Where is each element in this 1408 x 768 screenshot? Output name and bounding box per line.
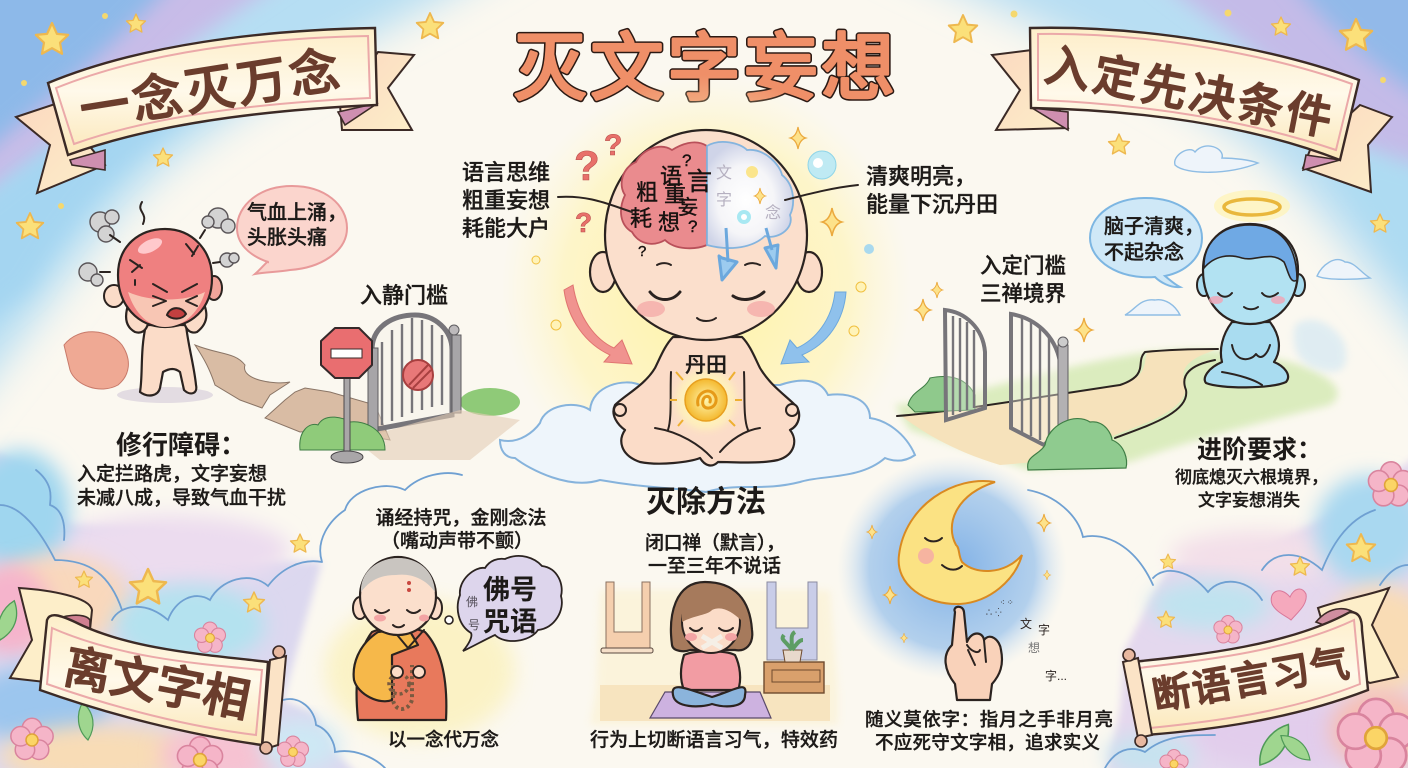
room illustration — [590, 582, 838, 725]
centre glow — [501, 75, 911, 505]
bubble text: 佛号 — [483, 575, 537, 605]
brain words: 言 — [687, 168, 712, 196]
steam puffs — [79, 208, 239, 286]
girl — [671, 582, 752, 706]
thought bubble — [445, 556, 562, 651]
head — [118, 229, 212, 327]
text: left brain labels: 耗能大户 — [462, 216, 550, 241]
head — [605, 130, 807, 340]
brain words: ? — [682, 151, 691, 170]
brain cloud — [707, 142, 793, 248]
text: 进阶要求: 进阶要求： — [1197, 436, 1322, 464]
banner text: 入定先决条件 — [1041, 38, 1339, 146]
text: 闭口禅: 闭口禅（默言）， — [645, 532, 785, 554]
gate closed — [368, 315, 520, 438]
bush: front — [1028, 419, 1127, 470]
banner: 一念灭万念 — [16, 28, 414, 193]
text body: 文字妄想消失 — [1198, 490, 1300, 510]
tan ground at gate and bush — [300, 410, 520, 460]
speech bubble: 脑子清爽 — [1090, 198, 1204, 287]
small clouds — [1125, 146, 1370, 315]
text: left brain labels: 粗重妄想 — [462, 188, 550, 213]
speech bubble: 气血上涌 — [237, 186, 347, 274]
brain down arrows — [719, 228, 778, 280]
bubble text — [1104, 215, 1204, 264]
figure: blue meditating child — [1197, 190, 1346, 387]
text: 诵经持咒: 诵经持咒，金刚念法 — [375, 506, 547, 529]
text body: 未减八成，导致气血干扰 — [77, 487, 286, 509]
text: left brain labels: 语言思维 — [462, 160, 550, 185]
arms — [126, 295, 206, 333]
figure: central meditating child — [590, 130, 822, 465]
cracked path — [195, 345, 390, 440]
floating letters — [985, 598, 1067, 683]
brain words: 语 — [660, 164, 682, 189]
banner: 离文字相 — [10, 588, 286, 754]
brain red — [621, 142, 707, 248]
floating letters: 文 — [1020, 616, 1032, 631]
sparkles around head — [532, 127, 874, 336]
text: 修行障碍 — [77, 430, 286, 509]
floating letters: ∴ ⁛ — [985, 608, 1002, 617]
head — [1197, 274, 1211, 296]
text body: 彻底熄灭六根境界， — [1175, 468, 1328, 487]
figure: angry red-headed child — [64, 202, 239, 403]
floating letters: 想 — [1028, 640, 1040, 655]
brain faint glyphs — [716, 164, 781, 222]
floating letters: 字... — [1045, 668, 1067, 683]
brain faint glyphs: 念 — [765, 203, 781, 222]
banner text: 断语言习气 — [1149, 642, 1354, 719]
bush: behind left gate — [908, 377, 975, 412]
title: 灭文字妄想 — [514, 28, 898, 109]
text: 诵经持咒: （嘴动声带不颤） — [381, 530, 533, 552]
banner text: 离文字相 — [60, 640, 254, 727]
background: top-left sky corner — [0, 0, 540, 440]
body — [1205, 322, 1288, 387]
bubble text: 头胀头痛 — [247, 226, 327, 249]
figure: monk — [325, 557, 515, 740]
title: 灭文字妄想 — [514, 28, 898, 109]
callout line right — [785, 185, 858, 200]
brain words: 妄 — [678, 196, 698, 219]
table and plant — [764, 632, 824, 693]
bubble text — [247, 201, 347, 249]
brain words — [630, 151, 712, 260]
brain faint glyphs: 文 — [716, 164, 732, 182]
text body — [77, 463, 286, 509]
arrow: blue to dantian — [781, 292, 846, 364]
banner text: 一念灭万念 — [76, 42, 346, 138]
small bubble text: 佛 — [466, 595, 478, 609]
brain faint glyphs: 字 — [716, 191, 732, 209]
label: 入定门槛 三禅境界 — [980, 254, 1066, 306]
text: right brain labels: 清爽明亮， — [866, 164, 976, 189]
dantian spiral — [670, 370, 742, 430]
arrow: red to dantian — [564, 285, 632, 364]
bubble text: 咒语 — [483, 607, 537, 637]
brain words: 重 — [664, 182, 686, 207]
question marks: ? — [575, 207, 592, 238]
text: 随义莫依字 — [865, 709, 1113, 753]
text: 随义莫依字: 不应死守文字相，追求实义 — [875, 732, 1100, 753]
text: 进阶要求 — [1175, 436, 1328, 510]
text: 闭口禅 — [645, 532, 785, 577]
gate open left — [945, 310, 985, 420]
background: bottom-left pastel clouds — [0, 440, 462, 768]
body — [613, 337, 799, 465]
question marks: ? — [604, 129, 622, 162]
banner: 入定先决条件 — [992, 28, 1392, 192]
callout line left — [558, 197, 632, 212]
text: right brain labels: 能量下沉丹田 — [866, 192, 998, 217]
small bubble text: 号 — [468, 618, 480, 632]
bubble text: 气血上涌， — [247, 201, 347, 224]
question marks — [574, 129, 622, 238]
robe — [357, 627, 446, 720]
label: 丹田: 丹田 — [685, 354, 727, 377]
mat — [650, 692, 771, 718]
brain words: 耗 — [630, 206, 652, 231]
halo — [1224, 199, 1280, 215]
text: 灭除方法: 灭除方法 — [646, 486, 766, 519]
background: top-right sky corner — [860, 0, 1408, 400]
text: 诵经持咒 — [375, 506, 547, 552]
gate open right — [1011, 314, 1068, 445]
brain words: ? — [638, 243, 646, 260]
text: 以一念代万念: 以一念代万念 — [388, 729, 499, 750]
moon illustration — [837, 456, 1067, 680]
floating letters: 字 — [1038, 622, 1050, 637]
stop sign — [321, 328, 372, 463]
text body — [1175, 468, 1328, 510]
head — [353, 597, 367, 619]
red bush — [64, 332, 128, 389]
centre cloud — [500, 381, 915, 492]
label: 入定门槛 三禅境界: 三禅境界 — [980, 282, 1066, 306]
text: 随义莫依字: 随义莫依字：指月之手非月亮 — [865, 709, 1113, 730]
bubble text: 脑子清爽， — [1104, 215, 1204, 238]
sparkles around gate — [915, 282, 1092, 342]
text: left brain labels — [462, 160, 550, 241]
body — [140, 325, 196, 395]
crescent moon — [899, 481, 1022, 604]
brain words: ? — [688, 217, 697, 236]
bubble text — [483, 575, 537, 637]
brain words: 粗 — [636, 180, 658, 205]
banner: 断语言习气 — [1123, 588, 1398, 747]
text: 闭口禅: 一至三年不说话 — [648, 555, 781, 577]
background: bottom-right pastel clouds — [1028, 440, 1408, 768]
floating letters: ⁖ ⁘ — [1000, 598, 1014, 607]
bubble text: 不起杂念 — [1104, 240, 1184, 264]
pointing hand — [946, 607, 1002, 700]
text: 行为上切断语言习气: 行为上切断语言习气，特效药 — [590, 729, 838, 751]
face — [657, 263, 760, 265]
text body: 入定拦路虎，文字妄想 — [77, 463, 267, 485]
green hill and path — [895, 349, 1338, 470]
text: 修行障碍: 修行障碍： — [116, 430, 246, 460]
text: right brain labels — [866, 164, 998, 217]
question marks: ? — [574, 142, 600, 189]
small bubble text — [466, 595, 480, 632]
label: 入静门槛: 入静门槛 — [360, 283, 448, 308]
ears — [590, 252, 616, 292]
brain words: 想 — [658, 210, 680, 235]
label: 入定门槛 三禅境界: 入定门槛 — [980, 254, 1066, 278]
